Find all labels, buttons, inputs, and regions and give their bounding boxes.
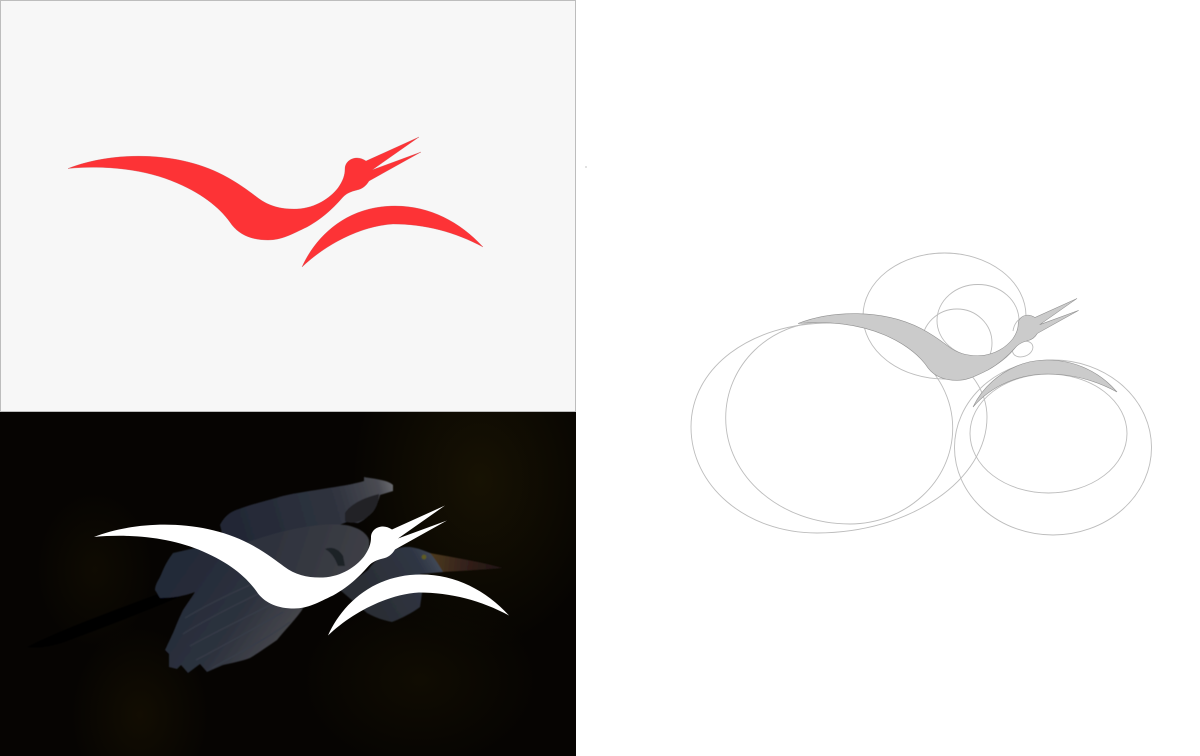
- grey heron wing: [973, 360, 1117, 407]
- egret beak: [430, 553, 503, 572]
- egret eye: [422, 555, 426, 559]
- egret wing hollow: [345, 494, 379, 523]
- egret feather lines: [183, 585, 290, 668]
- panel: red logo on light background: [0, 0, 576, 412]
- small stray dot: [586, 166, 587, 168]
- egret lower wing: [155, 540, 320, 673]
- egret tail and legs: [27, 590, 195, 648]
- egret shoulder: [240, 524, 369, 590]
- construction circles: [691, 253, 1152, 535]
- panel: dark photo background with white logo: [0, 412, 576, 756]
- egret upper wing: [220, 477, 393, 545]
- egret wing shade: [325, 548, 345, 566]
- egret body and head: [340, 547, 460, 622]
- red heron logo: [68, 137, 483, 267]
- grey heron body: [798, 298, 1079, 380]
- white heron logo: [94, 506, 509, 636]
- photo: flying egret: [27, 477, 503, 673]
- panel: logo construction diagram: [691, 253, 1152, 535]
